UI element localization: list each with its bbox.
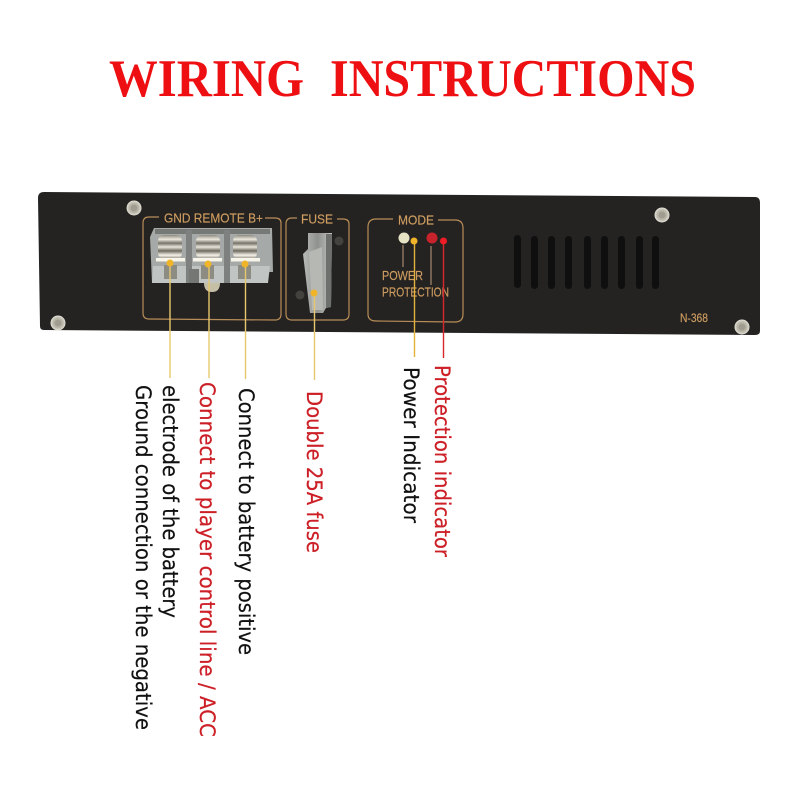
callout: protection indicator [430, 238, 454, 557]
label: ground line 2: electrode of the battery [158, 385, 182, 618]
callout: power indicator [399, 238, 423, 523]
leader line: ground [166, 260, 174, 378]
screw: bottom left [50, 316, 66, 330]
panel body [38, 192, 760, 335]
screw: top left [126, 200, 142, 216]
fuse [303, 233, 332, 313]
heading: fuse: FUSE [301, 212, 333, 226]
power LED [398, 232, 410, 244]
fuse screw bottom [296, 290, 304, 300]
frame: fuse [286, 218, 349, 320]
heading: terminal labels: GND REMOTE B+ [164, 212, 263, 226]
label: protection: PROTECTION [382, 286, 449, 300]
leader line: power [410, 238, 418, 357]
LED leader lines [403, 245, 431, 285]
label: protection indicator: Protection indicator [430, 365, 454, 557]
model number: N-368 [680, 313, 708, 325]
leader line: remote [204, 260, 212, 378]
label: power indicator: Power Indicator [399, 367, 423, 523]
frame: terminal [143, 217, 281, 320]
leader line: fuse [310, 290, 318, 380]
mode group [368, 214, 463, 322]
heading: mode: MODE [398, 214, 434, 228]
label: ground line 1: Ground connection or the negative [131, 385, 155, 730]
title: WIRING [109, 50, 304, 108]
fuse group [286, 212, 349, 320]
terminal group: power connections [143, 212, 281, 320]
label: battery positive: Connect to battery positive [234, 388, 258, 655]
screw: top right [654, 208, 670, 222]
callout: remote [195, 260, 219, 737]
vent slots [514, 235, 659, 289]
leader line: battery positive [242, 260, 248, 379]
leader line: protection [440, 238, 447, 358]
terminal block [150, 228, 273, 292]
label: fuse: Double 25A fuse [302, 391, 326, 553]
label: remote: Connect to player control line / ACC [195, 382, 219, 737]
callout: battery positive [234, 260, 258, 655]
label: power: POWER [382, 269, 423, 283]
fuse screw top [334, 236, 344, 246]
title [109, 50, 696, 108]
title: INSTRUCTIONS [330, 50, 696, 108]
callout: ground [131, 260, 182, 730]
panel: amplifier end plate [38, 192, 760, 335]
frame: mode [368, 219, 463, 322]
protection LED [426, 232, 438, 244]
screw: bottom right [734, 320, 750, 334]
callout: fuse [302, 290, 326, 553]
